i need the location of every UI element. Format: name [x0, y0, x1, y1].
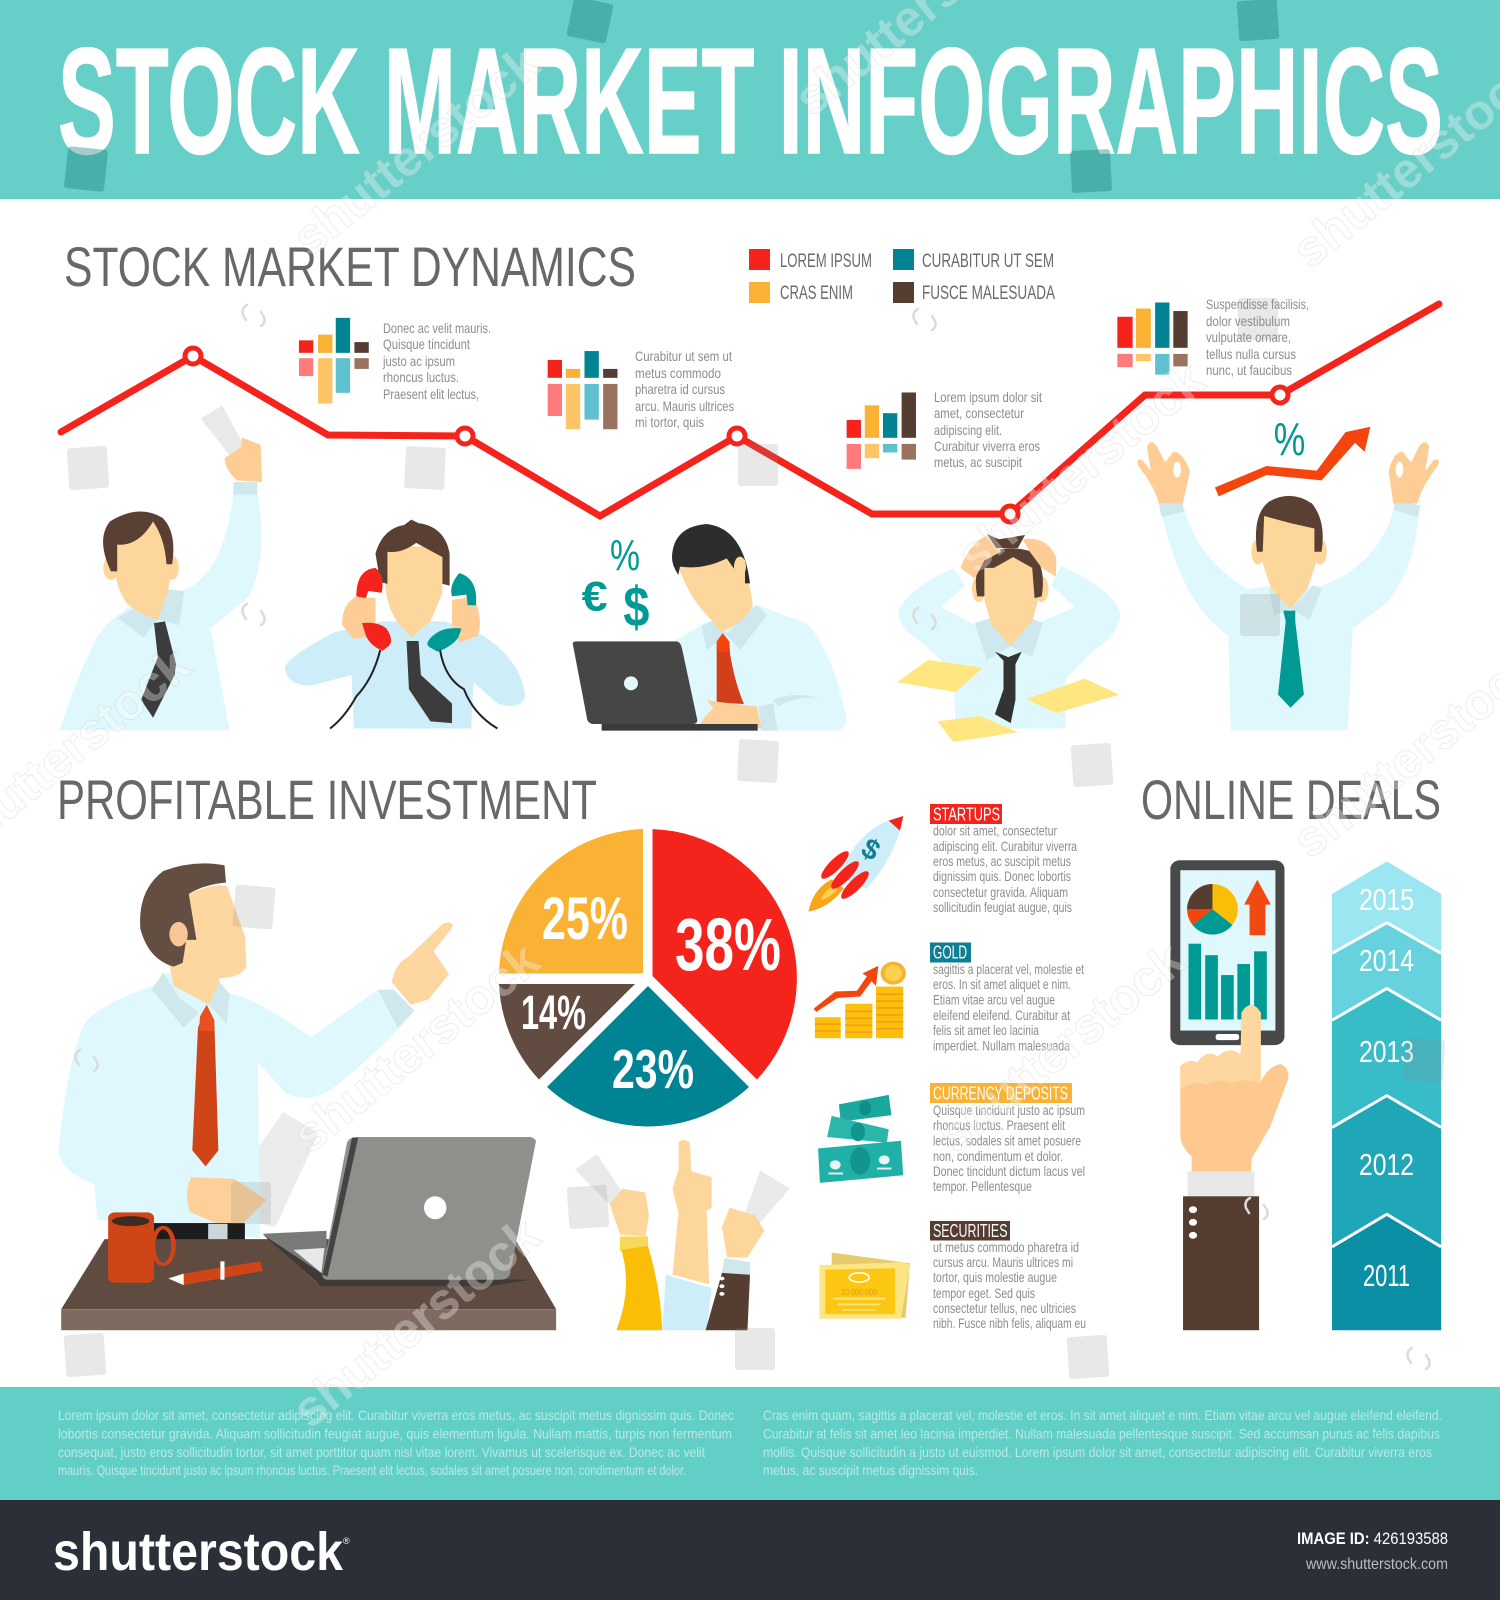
shutterstock diagonal watermarks: shutterstock — [282, 1206, 550, 1439]
text block 2 — [635, 348, 734, 430]
text block 1: rhoncus luctus. — [383, 369, 459, 385]
pie chart: 23% — [612, 1038, 694, 1100]
image id: IMAGE ID: 426193588 — [1297, 1529, 1448, 1548]
shutterstock diagonal watermarks: shutterstock — [927, 931, 1195, 1164]
shutterstock diagonal watermarks: shutterstock — [282, 34, 550, 267]
category: currency deposits: CURRENCY DEPOSITS — [933, 1084, 1068, 1104]
icon: gold coins with arrow — [814, 962, 906, 1038]
text block 3 — [934, 389, 1042, 470]
category: gold: Etiam vitae arcu vel augue — [933, 992, 1055, 1008]
person 3: laptop with currency symbols — [573, 524, 847, 731]
category: startups: dolor sit amet, consectetur — [933, 822, 1057, 838]
website: www.shutterstock.com — [1305, 1556, 1448, 1573]
category: gold — [930, 942, 1084, 1054]
coffee mug — [108, 1212, 173, 1283]
legend: LOREM IPSUM — [780, 251, 872, 272]
timeline arrows: 2015 — [1359, 882, 1414, 917]
text block 2: pharetra id cursus — [635, 381, 725, 397]
timeline arrows: 2011 — [1363, 1258, 1410, 1293]
icon: rocket: $ — [856, 832, 886, 868]
text block 3: adipiscing elit. — [934, 422, 1002, 438]
bottom text band — [0, 1387, 1500, 1500]
heading: profitable investment: PROFITABLE INVESTMENT — [57, 768, 597, 831]
text block 2: mi tortor, quis — [635, 414, 704, 430]
timeline arrows — [1332, 861, 1441, 1330]
footer text right — [763, 1407, 1442, 1478]
pie chart: 38% — [675, 903, 781, 986]
category: currency deposits: tempor. Pellentesque — [933, 1178, 1032, 1194]
mini bar chart 2 — [548, 351, 617, 429]
legend: FUSCE MALESUADA — [922, 283, 1055, 304]
icon: securities certificate: 10 000 000 — [841, 1288, 877, 1297]
tablet with hand — [1170, 860, 1288, 1330]
icon: percent: % — [610, 532, 640, 580]
mini bar chart 1 — [299, 318, 369, 404]
footer text right: metus, ac suscipit metus dignissim quis. — [763, 1462, 978, 1478]
text block 1: Donec ac velit mauris. — [383, 320, 491, 336]
mini bar chart 4 — [1117, 302, 1188, 375]
pie chart: 14% — [521, 987, 586, 1040]
shutterstock diagonal watermarks: shutterstock — [947, 351, 1215, 584]
category: startups — [930, 804, 1077, 915]
person 5: arms raised with rising arrow — [1137, 413, 1439, 730]
text block 3: Lorem ipsum dolor sit — [934, 389, 1042, 405]
person 2: two phones — [285, 520, 525, 729]
text block 4: nunc, ut faucibus — [1206, 362, 1292, 378]
icon: dollar: $ — [623, 577, 649, 640]
category: startups: eros metus, ac suscipit metus — [933, 853, 1071, 869]
person 4: hands on head with papers — [897, 534, 1121, 742]
category: startups: STARTUPS — [933, 804, 1000, 824]
text block 2: arcu. Mauris ultrices — [635, 398, 734, 414]
text block 2: metus commodo — [635, 365, 721, 381]
category: securities: tortor, quis molestie augue — [933, 1269, 1057, 1285]
category: gold: eros. In sit amet aliquet e nim. — [933, 976, 1071, 992]
text block 4: vulputate ornare, — [1206, 329, 1291, 345]
timeline arrows: 2013 — [1359, 1034, 1414, 1069]
person 1: raising paper — [60, 405, 262, 730]
text block 4: dolor vestibulum — [1206, 313, 1290, 329]
header band — [0, 0, 1500, 199]
category: gold: GOLD — [933, 942, 967, 962]
footer text left: lobortis consectetur gravida. Aliquam sollicitudin feugiat augue, quis elementum ligula. Nullam mattis, turpis non fermentum — [58, 1426, 732, 1442]
heading: stock market dynamics: STOCK MARKET DYNAMICS — [64, 235, 636, 298]
shutterstock diagonal watermarks: shutterstock — [282, 931, 550, 1164]
pen — [168, 1261, 263, 1285]
legend: CRAS ENIM — [780, 283, 853, 304]
text block 3: amet, consectetur — [934, 405, 1024, 421]
text block 3: metus, ac suscipit — [934, 454, 1022, 470]
text block 1: Quisque tincidunt — [383, 336, 470, 352]
source footer — [0, 1500, 1500, 1600]
category: securities: cursus arcu. Mauris ultrices mi — [933, 1254, 1073, 1270]
shutterstock logo: shutterstock — [53, 1522, 344, 1582]
category: gold: eleifend eleifend. Curabitur at — [933, 1007, 1070, 1023]
category: startups: adipiscing elit. Curabitur viverra — [933, 838, 1077, 854]
icon: euro: € — [582, 573, 608, 620]
category: securities: ut metus commodo pharetra id — [933, 1239, 1079, 1255]
text block 1 — [382, 320, 491, 402]
presenter at desk — [59, 863, 556, 1330]
text block 3: Curabitur viverra eros — [934, 438, 1040, 454]
pie chart — [499, 829, 797, 1126]
footer text left — [58, 1407, 734, 1478]
category: gold: imperdiet. Nullam malesuada — [933, 1038, 1070, 1054]
category: currency deposits: lectus, sodales sit amet posuere — [933, 1132, 1081, 1148]
category: securities: SECURITIES — [933, 1221, 1008, 1241]
category: currency deposits: non, condimentum et dolor. — [933, 1148, 1063, 1164]
text block 1: Praesent elit lectus, — [383, 386, 479, 402]
category: securities: nibh. Fusce nibh felis, aliquam eu — [933, 1315, 1086, 1331]
category: securities: consectetur tellus, nec ultricies — [933, 1300, 1076, 1316]
category: currency deposits: rhoncus luctus. Praesent elit — [933, 1117, 1065, 1133]
category: currency deposits — [930, 1083, 1085, 1194]
category: startups: sollicitudin feugiat augue, quis — [933, 899, 1072, 915]
text block 4 — [1206, 296, 1309, 378]
watermark swirls — [76, 305, 1430, 1369]
category: currency deposits: Donec tincidunt dictum lacus vel — [933, 1163, 1085, 1179]
icon: percent: % — [1274, 413, 1305, 465]
category: currency deposits: Quisque tincidunt justo ac ipsum — [933, 1102, 1085, 1118]
timeline arrows: 2012 — [1359, 1147, 1414, 1182]
footer text left: Lorem ipsum dolor sit amet, consectetur adipiscing elit. Curabitur viverra eros metus, ac suscipit metus dignissim quis. Donec — [58, 1407, 734, 1423]
legend — [749, 249, 1055, 304]
text block 4: Suspendisse facilisis, — [1206, 296, 1309, 312]
icon: rocket — [808, 816, 903, 912]
icon: banknotes — [818, 1095, 903, 1183]
footer text left: consequat, justo eros sollicitudin tortor, sit amet porttitor quam nisl vitae lorem. Vivamus ut scelerisque ex. Donec ac velit — [58, 1444, 705, 1460]
text block 1: justo ac ipsum — [382, 353, 455, 369]
pie chart: 25% — [542, 885, 628, 952]
timeline arrows: 2014 — [1359, 943, 1414, 978]
category: gold: sagittis a placerat vel, molestie et — [933, 961, 1084, 977]
line chart: market trend — [61, 304, 1439, 522]
laptop — [263, 1137, 536, 1286]
category: securities — [930, 1221, 1086, 1331]
source footer: ® — [343, 1536, 350, 1546]
legend: CURABITUR UT SEM — [922, 251, 1054, 272]
category: startups: dignissim quis. Donec lobortis — [933, 868, 1071, 884]
category: startups: consectetur gravida. Aliquam — [933, 884, 1068, 900]
mini bar chart 3 — [847, 392, 916, 469]
category: gold: felis sit amet leo lacinia — [933, 1022, 1039, 1038]
desk — [61, 1239, 556, 1330]
text block 4: tellus nulla cursus — [1206, 346, 1296, 362]
text block 2: Curabitur ut sem ut — [635, 348, 732, 364]
icon: securities certificate — [819, 1253, 910, 1319]
raised hands — [575, 1140, 790, 1330]
watermark tiles — [64, 0, 1445, 1379]
footer text left: mauris. Quisque tincidunt justo ac ipsum rhoncus luctus. Praesent elit lectus, sodales sit amet posuere non, condimentum et dolor. — [58, 1462, 686, 1478]
category: securities: tempor eget. Sed quis — [933, 1285, 1035, 1301]
